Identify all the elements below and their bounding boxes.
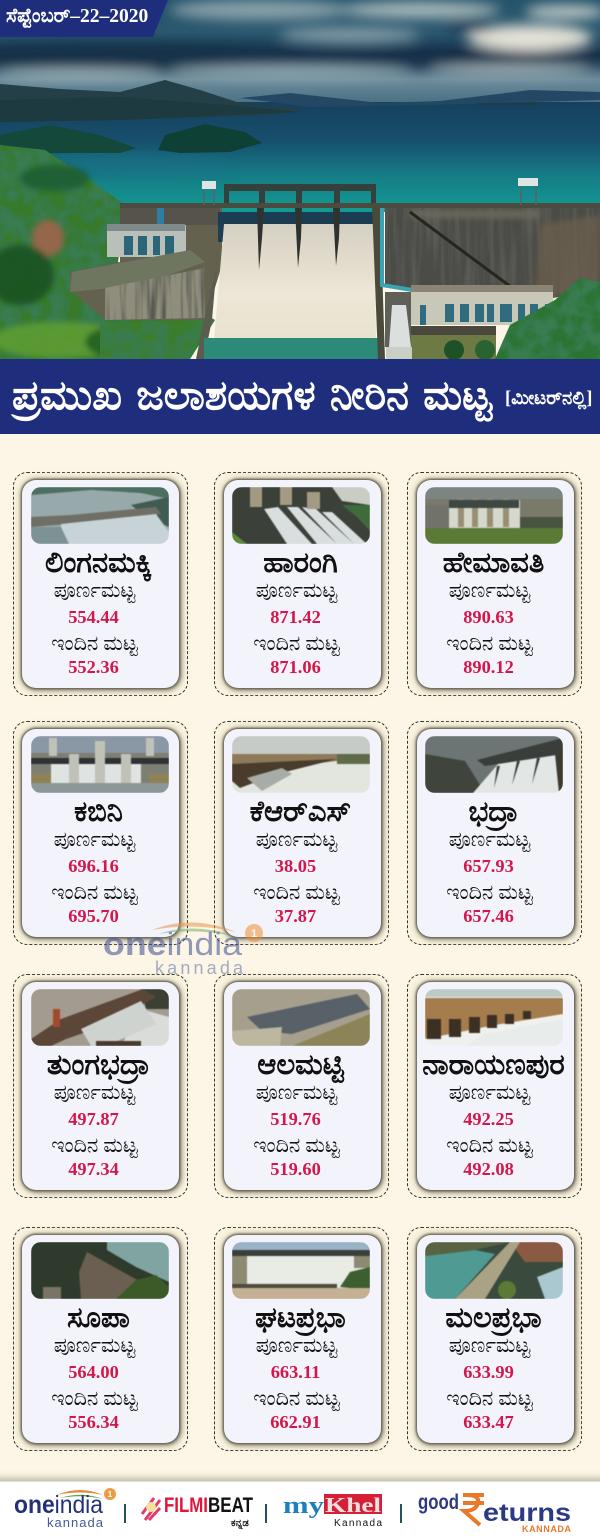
logo: GoodReturns: KANNADA [522, 1524, 572, 1534]
photo [425, 736, 563, 793]
divider [400, 1504, 402, 1523]
photo [31, 736, 169, 793]
name: ಘಟಪ್ರಭಾ [255, 1302, 346, 1334]
photo [425, 1242, 563, 1299]
full level label: ಪೂರ್ಣಮಟ್ಟ [256, 1335, 337, 1357]
name: ಆಲಮಟ್ಟಿ [257, 1049, 344, 1081]
full level value: 696.16 [68, 856, 119, 876]
divider [265, 1504, 267, 1523]
full level label: ಪೂರ್ಣಮಟ್ಟ [449, 829, 530, 851]
islands [0, 125, 136, 153]
today value: 492.08 [463, 1159, 514, 1179]
full level label: ಪೂರ್ಣಮಟ್ಟ [256, 829, 337, 851]
photo [232, 487, 370, 544]
today label: ಇಂದಿನ ಮಟ್ಟ [446, 1135, 533, 1157]
panel: Tungabhadra [13, 974, 188, 1198]
spillway [218, 212, 376, 242]
photo [425, 989, 563, 1046]
logo: FilmiBeat [140, 1494, 253, 1530]
panel: Linganamakki [13, 472, 188, 696]
name: ನಾರಾಯಣಪುರ [422, 1049, 565, 1081]
full level label: ಪೂರ್ಣಮಟ್ಟ [54, 829, 135, 851]
today label: ಇಂದಿನ ಮಟ್ಟ [51, 633, 138, 655]
panel: Ghataprabha [214, 1227, 389, 1451]
right power house [411, 287, 553, 325]
footer [0, 1470, 600, 1538]
logo: MyKhel: Kannada [334, 1518, 382, 1529]
full level label: ಪೂರ್ಣಮಟ್ಟ [54, 580, 135, 602]
today value: 890.12 [463, 657, 514, 677]
name: ತುಂಗಭದ್ರಾ [47, 1049, 150, 1081]
panel: Narayanapura [407, 974, 582, 1198]
panel: KRS [214, 721, 389, 945]
name: ಹೇಮಾವತಿ [443, 547, 544, 579]
watermark logo: oneindia [103, 926, 242, 962]
name: ಮಲಪ್ರಭಾ [445, 1302, 542, 1334]
photo [232, 1242, 370, 1299]
water [0, 102, 600, 212]
today label: ಇಂದಿನ ಮಟ್ಟ [446, 882, 533, 904]
panel: Supa [13, 1227, 188, 1451]
far hills [0, 80, 305, 122]
right trees [495, 278, 600, 359]
today value: 37.87 [275, 906, 316, 926]
full level value: 890.63 [463, 607, 514, 627]
today label: ಇಂದಿನ ಮಟ್ಟ [446, 1388, 533, 1410]
watermark logo: 1 [251, 928, 257, 940]
logo: MyKhel: my [283, 1493, 324, 1519]
name: ಕಬಿನಿ [74, 796, 123, 828]
logo: FilmiBeat: ಕನ್ನಡ [231, 1518, 249, 1530]
full level label: ಪೂರ್ಣಮಟ್ಟ [449, 1335, 530, 1357]
today label: ಇಂದಿನ ಮಟ್ಟ [253, 633, 340, 655]
logo: FilmiBeat: FILMI [164, 1494, 208, 1517]
watermark logo: kannada [155, 958, 244, 978]
full level value: 633.99 [463, 1362, 514, 1382]
date badge: ಸೆಪ್ಟೆಂಬರ್–22–2020 [6, 6, 148, 27]
blue pipe [382, 205, 412, 290]
panel: Bhadra [407, 721, 582, 945]
full level value: 564.00 [68, 1362, 119, 1382]
today value: 662.91 [270, 1412, 321, 1432]
full level value: 871.42 [270, 607, 321, 627]
full level value: 663.11 [271, 1362, 320, 1382]
today label: ಇಂದಿನ ಮಟ್ಟ [51, 1388, 138, 1410]
today label: ಇಂದಿನ ಮಟ್ಟ [253, 1135, 340, 1157]
gate bridge and piers [120, 184, 600, 270]
logo: oneindia kannada [14, 1488, 116, 1530]
full level label: ಪೂರ್ಣಮಟ್ಟ [449, 580, 530, 602]
unit note: [ಮೀಟರ್‌ನಲ್ಲಿ] [505, 389, 592, 409]
left green hill [0, 145, 215, 359]
today value: 556.34 [68, 1412, 119, 1432]
today value: 695.70 [68, 906, 119, 926]
panel: Malaprabha [407, 1227, 582, 1451]
full level label: ಪೂರ್ಣಮಟ್ಟ [54, 1082, 135, 1104]
logo: oneindia kannada: oneindia [14, 1491, 103, 1519]
panel: Hemavathi [407, 472, 582, 696]
today label: ಇಂದಿನ ಮಟ್ಟ [253, 1388, 340, 1410]
today label: ಇಂದಿನ ಮಟ್ಟ [51, 1135, 138, 1157]
full level value: 497.87 [68, 1109, 119, 1129]
photo [232, 989, 370, 1046]
left dam wall and buildings [70, 205, 222, 320]
watermark logo [103, 922, 263, 978]
panel: Almatti [214, 974, 389, 1198]
name: ಹಾರಂಗಿ [263, 547, 338, 579]
full level value: 554.44 [68, 607, 119, 627]
full level label: ಪೂರ್ಣಮಟ್ಟ [449, 1082, 530, 1104]
today value: 497.34 [68, 1159, 119, 1179]
today value: 633.47 [463, 1412, 514, 1432]
today label: ಇಂದಿನ ಮಟ್ಟ [253, 882, 340, 904]
logo: oneindia kannada: 1 [108, 1490, 113, 1499]
name: ಭದ್ರಾ [468, 796, 519, 828]
full level value: 492.25 [463, 1109, 514, 1129]
green bank below the left wall [100, 320, 208, 359]
divider [124, 1504, 126, 1523]
title: ಪ್ರಮುಖ ಜಲಾಶಯಗಳ ನೀರಿನ ಮಟ್ಟ [12, 372, 492, 418]
title band [0, 359, 600, 434]
logo: GoodReturns: eturns [483, 1499, 571, 1527]
right dam wall [385, 205, 600, 300]
panel: Kabini [13, 721, 188, 945]
hero photo: dam with open spillway [0, 0, 600, 359]
today label: ಇಂದಿನ ಮಟ್ಟ [446, 633, 533, 655]
full level value: 657.93 [463, 856, 514, 876]
full level label: ಪೂರ್ಣಮಟ್ಟ [54, 1335, 135, 1357]
full level value: 519.76 [270, 1109, 321, 1129]
logo: oneindia kannada: kannada [47, 1515, 104, 1530]
today value: 519.60 [270, 1159, 321, 1179]
name: ಲಿಂಗನಮಕ್ಕಿ [45, 547, 152, 579]
towers on water [202, 178, 538, 189]
photo [31, 487, 169, 544]
date badge [0, 0, 168, 37]
logo: GoodReturns [418, 1491, 572, 1534]
panel: Harangi [214, 472, 389, 696]
photo [425, 487, 563, 544]
photo [232, 736, 370, 793]
photo [31, 989, 169, 1046]
logo: GoodReturns: good [418, 1491, 459, 1514]
name: ಸೂಪಾ [67, 1302, 130, 1334]
full level label: ಪೂರ್ಣಮಟ್ಟ [256, 1082, 337, 1104]
sky [0, 0, 600, 110]
full level label: ಪೂರ್ಣಮಟ್ಟ [256, 580, 337, 602]
photo [31, 1242, 169, 1299]
logo: MyKhel: Khel [325, 1493, 381, 1517]
today value: 871.06 [270, 657, 321, 677]
today value: 552.36 [68, 657, 119, 677]
logo: MyKhel [283, 1493, 382, 1529]
full level value: 38.05 [275, 856, 316, 876]
today label: ಇಂದಿನ ಮಟ್ಟ [51, 882, 138, 904]
today value: 657.46 [463, 906, 514, 926]
name: ಕೆಆರ್‌ಎಸ್ [250, 796, 351, 828]
